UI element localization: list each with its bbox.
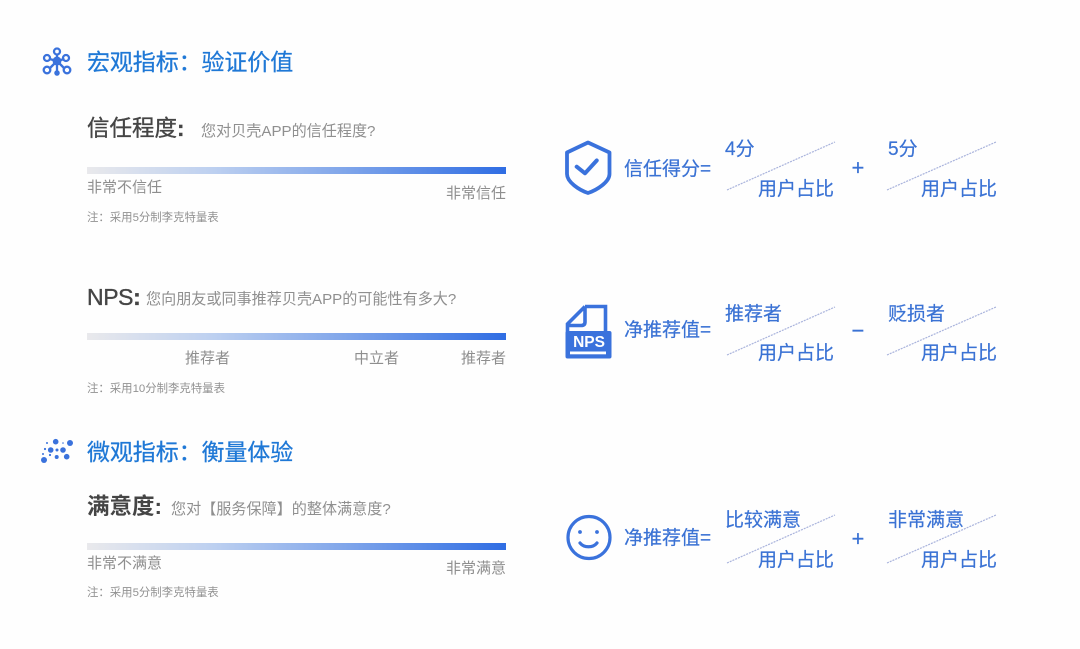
note: NPS scale: 注：采用10分制李克特量表 xyxy=(87,383,225,395)
heading: satisfaction: 满意度: xyxy=(87,494,162,519)
formula: promoters: 推荐者 xyxy=(725,304,782,325)
icon: dots cluster xyxy=(41,438,73,463)
formula: denominator: 用户占比 xyxy=(921,343,997,364)
formula: denominator: 用户占比 xyxy=(921,179,997,200)
gradient bar: trust scale xyxy=(87,167,506,174)
formula: trust fraction 4: 4分 xyxy=(725,139,755,160)
icon: NPS document: NPS xyxy=(573,334,605,351)
icon: network nodes xyxy=(42,47,72,76)
question: trust: 您对贝壳APP的信任程度? xyxy=(201,123,375,140)
note: trust scale: 注：采用5分制李克特量表 xyxy=(87,212,219,224)
formula: detractors: 贬损者 xyxy=(888,304,945,325)
label: very distrust: 非常不信任 xyxy=(87,179,162,196)
formula: denominator: 用户占比 xyxy=(921,550,997,571)
formula: trust fraction 5: 5分 xyxy=(888,139,918,160)
formula: very satisfied: 非常满意 xyxy=(888,510,964,531)
gradient bar: satisfaction scale xyxy=(87,543,506,550)
label: promoter low: 推荐者 xyxy=(185,350,230,367)
label: very satisfied: 非常满意 xyxy=(446,560,506,577)
note: satisfaction scale: 注：采用5分制李克特量表 xyxy=(87,587,219,599)
operator plus: + xyxy=(852,155,864,180)
operator minus: − xyxy=(852,318,864,343)
formula: fairly satisfied: 比较满意 xyxy=(725,510,801,531)
formula label: satisfaction score: 净推荐值= xyxy=(624,528,711,549)
question: NPS: 您向朋友或同事推荐贝壳APP的可能性有多大? xyxy=(146,291,456,308)
icon: shield check xyxy=(565,140,612,195)
icon: smiley face xyxy=(566,514,612,560)
label: very dissatisfied: 非常不满意 xyxy=(87,555,162,572)
gradient bar: NPS scale xyxy=(87,333,506,340)
label: promoter high: 推荐者 xyxy=(461,350,506,367)
heading: macro metrics: 宏观指标：验证价值 xyxy=(87,49,293,75)
label: very trust: 非常信任 xyxy=(446,185,506,202)
icon: NPS document xyxy=(566,304,612,358)
heading: trust level: 信任程度: xyxy=(87,116,185,141)
formula: denominator: 用户占比 xyxy=(758,343,834,364)
formula label: trust score: 信任得分= xyxy=(624,159,711,180)
operator plus: + xyxy=(852,526,864,551)
heading: micro metrics: 微观指标：衡量体验 xyxy=(87,439,293,465)
question: satisfaction: 您对【服务保障】的整体满意度? xyxy=(171,501,391,518)
formula: denominator: 用户占比 xyxy=(758,179,834,200)
label: neutral: 中立者 xyxy=(354,350,399,367)
formula: denominator: 用户占比 xyxy=(758,550,834,571)
heading: NPS: NPS: xyxy=(87,284,140,310)
formula label: net promoter score: 净推荐值= xyxy=(624,320,711,341)
